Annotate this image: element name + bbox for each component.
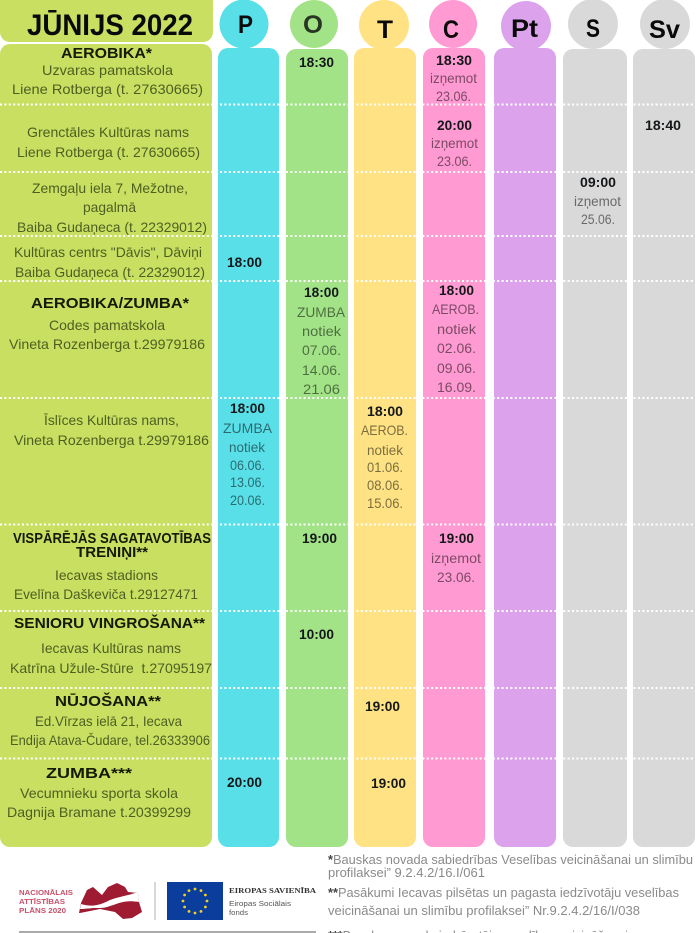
times: Saturday	[574, 174, 621, 227]
times: Tuesday: 14.06.	[302, 362, 341, 378]
row: Kultūras centrs Dāvis: Kultūras centrs "Dāvis", Dāviņi	[14, 244, 202, 260]
row: Aerobika, Uzvaras pamatskola: Uzvaras pamatskola	[42, 62, 173, 78]
column: Friday	[494, 1, 556, 847]
row: Aerobika/Zumba, Codes pamatskola	[9, 295, 205, 352]
times: Tuesday: notiek	[302, 323, 342, 339]
times: Tuesday: 18:30	[299, 54, 334, 70]
times: Tuesday: 07.06.	[302, 342, 341, 358]
row: Zemgaļu iela: Baiba Gudaņeca (t. 22329012)	[17, 219, 207, 235]
times: Monday: ZUMBA	[223, 420, 273, 436]
column: Saturday: S	[586, 15, 600, 43]
row: Aerobika/Zumba, Codes pamatskola: Codes pamatskola	[49, 317, 165, 333]
row: Nūjošana: Endija Atava-Čudare, tel.26333906	[10, 732, 210, 748]
row: Vispārējās sagatavotības treniņi: VISPĀRĒJĀS SAGATAVOTĪBAS	[13, 530, 211, 547]
times: Tuesday	[297, 54, 346, 642]
times: Sunday: 18:40	[645, 117, 681, 133]
row: Nūjošana: Ed.Vīrzas ielā 21, Iecava	[35, 713, 182, 729]
times: Wednesday: AEROB.	[361, 422, 408, 438]
times: Thursday: 16.09.	[437, 379, 476, 395]
times: Saturday: izņemot	[574, 193, 621, 209]
times: Tuesday: 19:00	[302, 530, 337, 546]
row: Kultūras centrs Dāvis	[14, 244, 205, 280]
times: Monday: 20.06.	[230, 492, 265, 508]
times: Wednesday: 15.06.	[367, 495, 403, 511]
row: Zemgaļu iela	[17, 180, 207, 235]
times: Wednesday: 01.06.	[367, 459, 403, 475]
column: Monday: P	[238, 11, 253, 39]
logo: Nacionālais attīstības plāns 2020: PLĀNS 2020	[19, 906, 66, 915]
row: Īslīces Kultūras nams: Īslīces Kultūras nams,	[44, 412, 179, 428]
times: Monday	[223, 254, 273, 790]
row: Vispārējās sagatavotības treniņi: Iecavas stadions	[55, 567, 158, 583]
text: European Union, Social Fund: fonds	[229, 910, 249, 917]
text: European Union, Social Fund: Eiropas Sociālais	[229, 901, 292, 908]
divider	[154, 882, 156, 920]
row: Īslīces Kultūras nams	[14, 412, 209, 448]
row: Aerobika/Zumba, Codes pamatskola: AEROBIKA/ZUMBA*	[31, 295, 189, 312]
column: Monday	[218, 0, 279, 847]
row: Zemgaļu iela: Zemgaļu iela 7, Mežotne,	[32, 180, 188, 196]
row: Grenctāles Kultūras nams: Liene Rotberga (t. 27630665)	[17, 144, 200, 160]
times: Wednesday: 19:00	[371, 775, 406, 791]
times: Monday: 06.06.	[230, 457, 265, 473]
column: Wednesday	[354, 0, 416, 847]
times: Thursday: 02.06.	[437, 340, 476, 356]
row: Vispārējās sagatavotības treniņi: TRENIŅI**	[76, 544, 148, 561]
logo: Nacionālais attīstības plāns 2020: NACIONĀLAIS	[19, 888, 73, 897]
row: Kultūras centrs Dāvis: Baiba Gudaņeca (t. 22329012)	[15, 264, 205, 280]
text: European Union, Social Fund	[229, 886, 317, 917]
title banner	[0, 0, 213, 42]
times: Thursday: 09.06.	[437, 360, 476, 376]
row: Grenctāles Kultūras nams: Grenctāles Kultūras nams	[27, 124, 189, 140]
times: Thursday: 20:00	[437, 117, 472, 133]
footnotes: **Pasākumi Iecavas pilsētas un pagasta iedzīvotāju veselības	[328, 885, 679, 900]
column: Thursday	[423, 0, 485, 847]
row: Nūjošana	[10, 692, 210, 748]
times: Thursday: izņemot	[431, 135, 478, 151]
times: Thursday: 18:00	[439, 282, 474, 298]
footnotes: profilaksei” 9.2.4.2/16.I/061	[328, 865, 485, 880]
times: Wednesday: 18:00	[367, 403, 403, 419]
row: Zumba, Vecumnieki	[7, 765, 191, 820]
row: Senioru vingrošana: Katrīna Užule-Stūre t.27095197	[10, 660, 212, 676]
row: Grenctāles Kultūras nams	[17, 124, 200, 160]
times: Thursday: izņemot	[430, 70, 477, 86]
times: Wednesday	[361, 403, 408, 791]
column: Thursday: C	[443, 16, 459, 44]
times: Tuesday: 18:00	[304, 284, 339, 300]
times: Monday: 18:00	[230, 400, 265, 416]
row: Senioru vingrošana: Iecavas Kultūras nams	[41, 640, 181, 656]
column: Friday: Pt	[511, 15, 539, 43]
column: Sunday: Sv	[649, 16, 680, 44]
times: Wednesday: 08.06.	[367, 477, 403, 493]
times: Tuesday: 21.06	[303, 381, 340, 397]
column: Tuesday	[286, 0, 348, 847]
row: Nūjošana: NŪJOŠANA**	[55, 692, 161, 710]
title banner: JŪNIJS 2022	[27, 9, 193, 42]
footer rule	[19, 931, 316, 933]
column: Tuesday: O	[303, 11, 323, 39]
column: Sunday	[633, 0, 695, 847]
row: Senioru vingrošana	[10, 614, 212, 676]
times: Monday: 18:00	[227, 254, 262, 270]
times: Wednesday: 19:00	[365, 698, 400, 714]
times: Saturday: 25.06.	[581, 211, 615, 227]
row: Aerobika/Zumba, Codes pamatskola: Vineta Rozenberga t.29979186	[9, 336, 205, 352]
row: Aerobika, Uzvaras pamatskola	[12, 45, 203, 97]
row: Vispārējās sagatavotības treniņi: Evelīna Daškeviča t.29127471	[14, 586, 198, 602]
times: Thursday: notiek	[437, 321, 477, 337]
times: Wednesday: notiek	[367, 442, 404, 458]
times: Monday: 13.06.	[230, 474, 265, 490]
panel: activities and locations background	[0, 44, 212, 847]
times: Saturday: 09:00	[580, 174, 616, 190]
footnotes: *Bauskas novada sabiedrības Veselības veicināšanai un slimību	[328, 852, 693, 867]
row: Zumba, Vecumnieki: Vecumnieku sporta skola	[20, 785, 178, 801]
times: Tuesday: ZUMBA	[297, 304, 346, 320]
column: Wednesday: T	[377, 16, 393, 44]
row: Zumba, Vecumnieki: Dagnija Bramane t.20399299	[7, 804, 191, 820]
times: Thursday: 23.06.	[437, 569, 475, 585]
row: Vispārējās sagatavotības treniņi	[13, 530, 211, 602]
times: Tuesday: 10:00	[299, 626, 334, 642]
row: Aerobika, Uzvaras pamatskola: Liene Rotberga (t. 27630665)	[12, 81, 203, 97]
times: Thursday: 18:30	[436, 52, 472, 68]
column: Saturday	[563, 0, 627, 847]
logo: Nacionālais attīstības plāns 2020	[19, 883, 142, 919]
times: Monday: notiek	[229, 439, 266, 455]
row: Zumba, Vecumnieki: ZUMBA***	[46, 765, 132, 782]
times: Thursday: 23.06.	[436, 88, 471, 104]
text: European Union, Social Fund: EIROPAS SAVIENĪBA	[229, 886, 317, 895]
row: Zemgaļu iela: pagalmā	[83, 199, 136, 215]
footnotes	[328, 852, 693, 933]
logo: EU flag	[167, 882, 223, 920]
row: Īslīces Kultūras nams: Vineta Rozenberga t.29979186	[14, 432, 209, 448]
row: Senioru vingrošana: SENIORU VINGROŠANA**	[14, 614, 205, 632]
footnotes: veicināšanai un slimību profilaksei” Nr.9.2.4.2/16/I/038	[328, 903, 640, 918]
times: Thursday: AEROB.	[432, 301, 479, 317]
logo: Nacionālais attīstības plāns 2020: ATTĪSTĪBAS	[19, 897, 65, 906]
row: Aerobika, Uzvaras pamatskola: AEROBIKA*	[61, 45, 152, 62]
times: Thursday: izņemot	[431, 550, 481, 566]
times: Thursday: 23.06.	[437, 153, 472, 169]
times: Thursday	[430, 52, 481, 585]
times: Monday: 20:00	[227, 774, 262, 790]
times: Thursday: 19:00	[439, 530, 474, 546]
